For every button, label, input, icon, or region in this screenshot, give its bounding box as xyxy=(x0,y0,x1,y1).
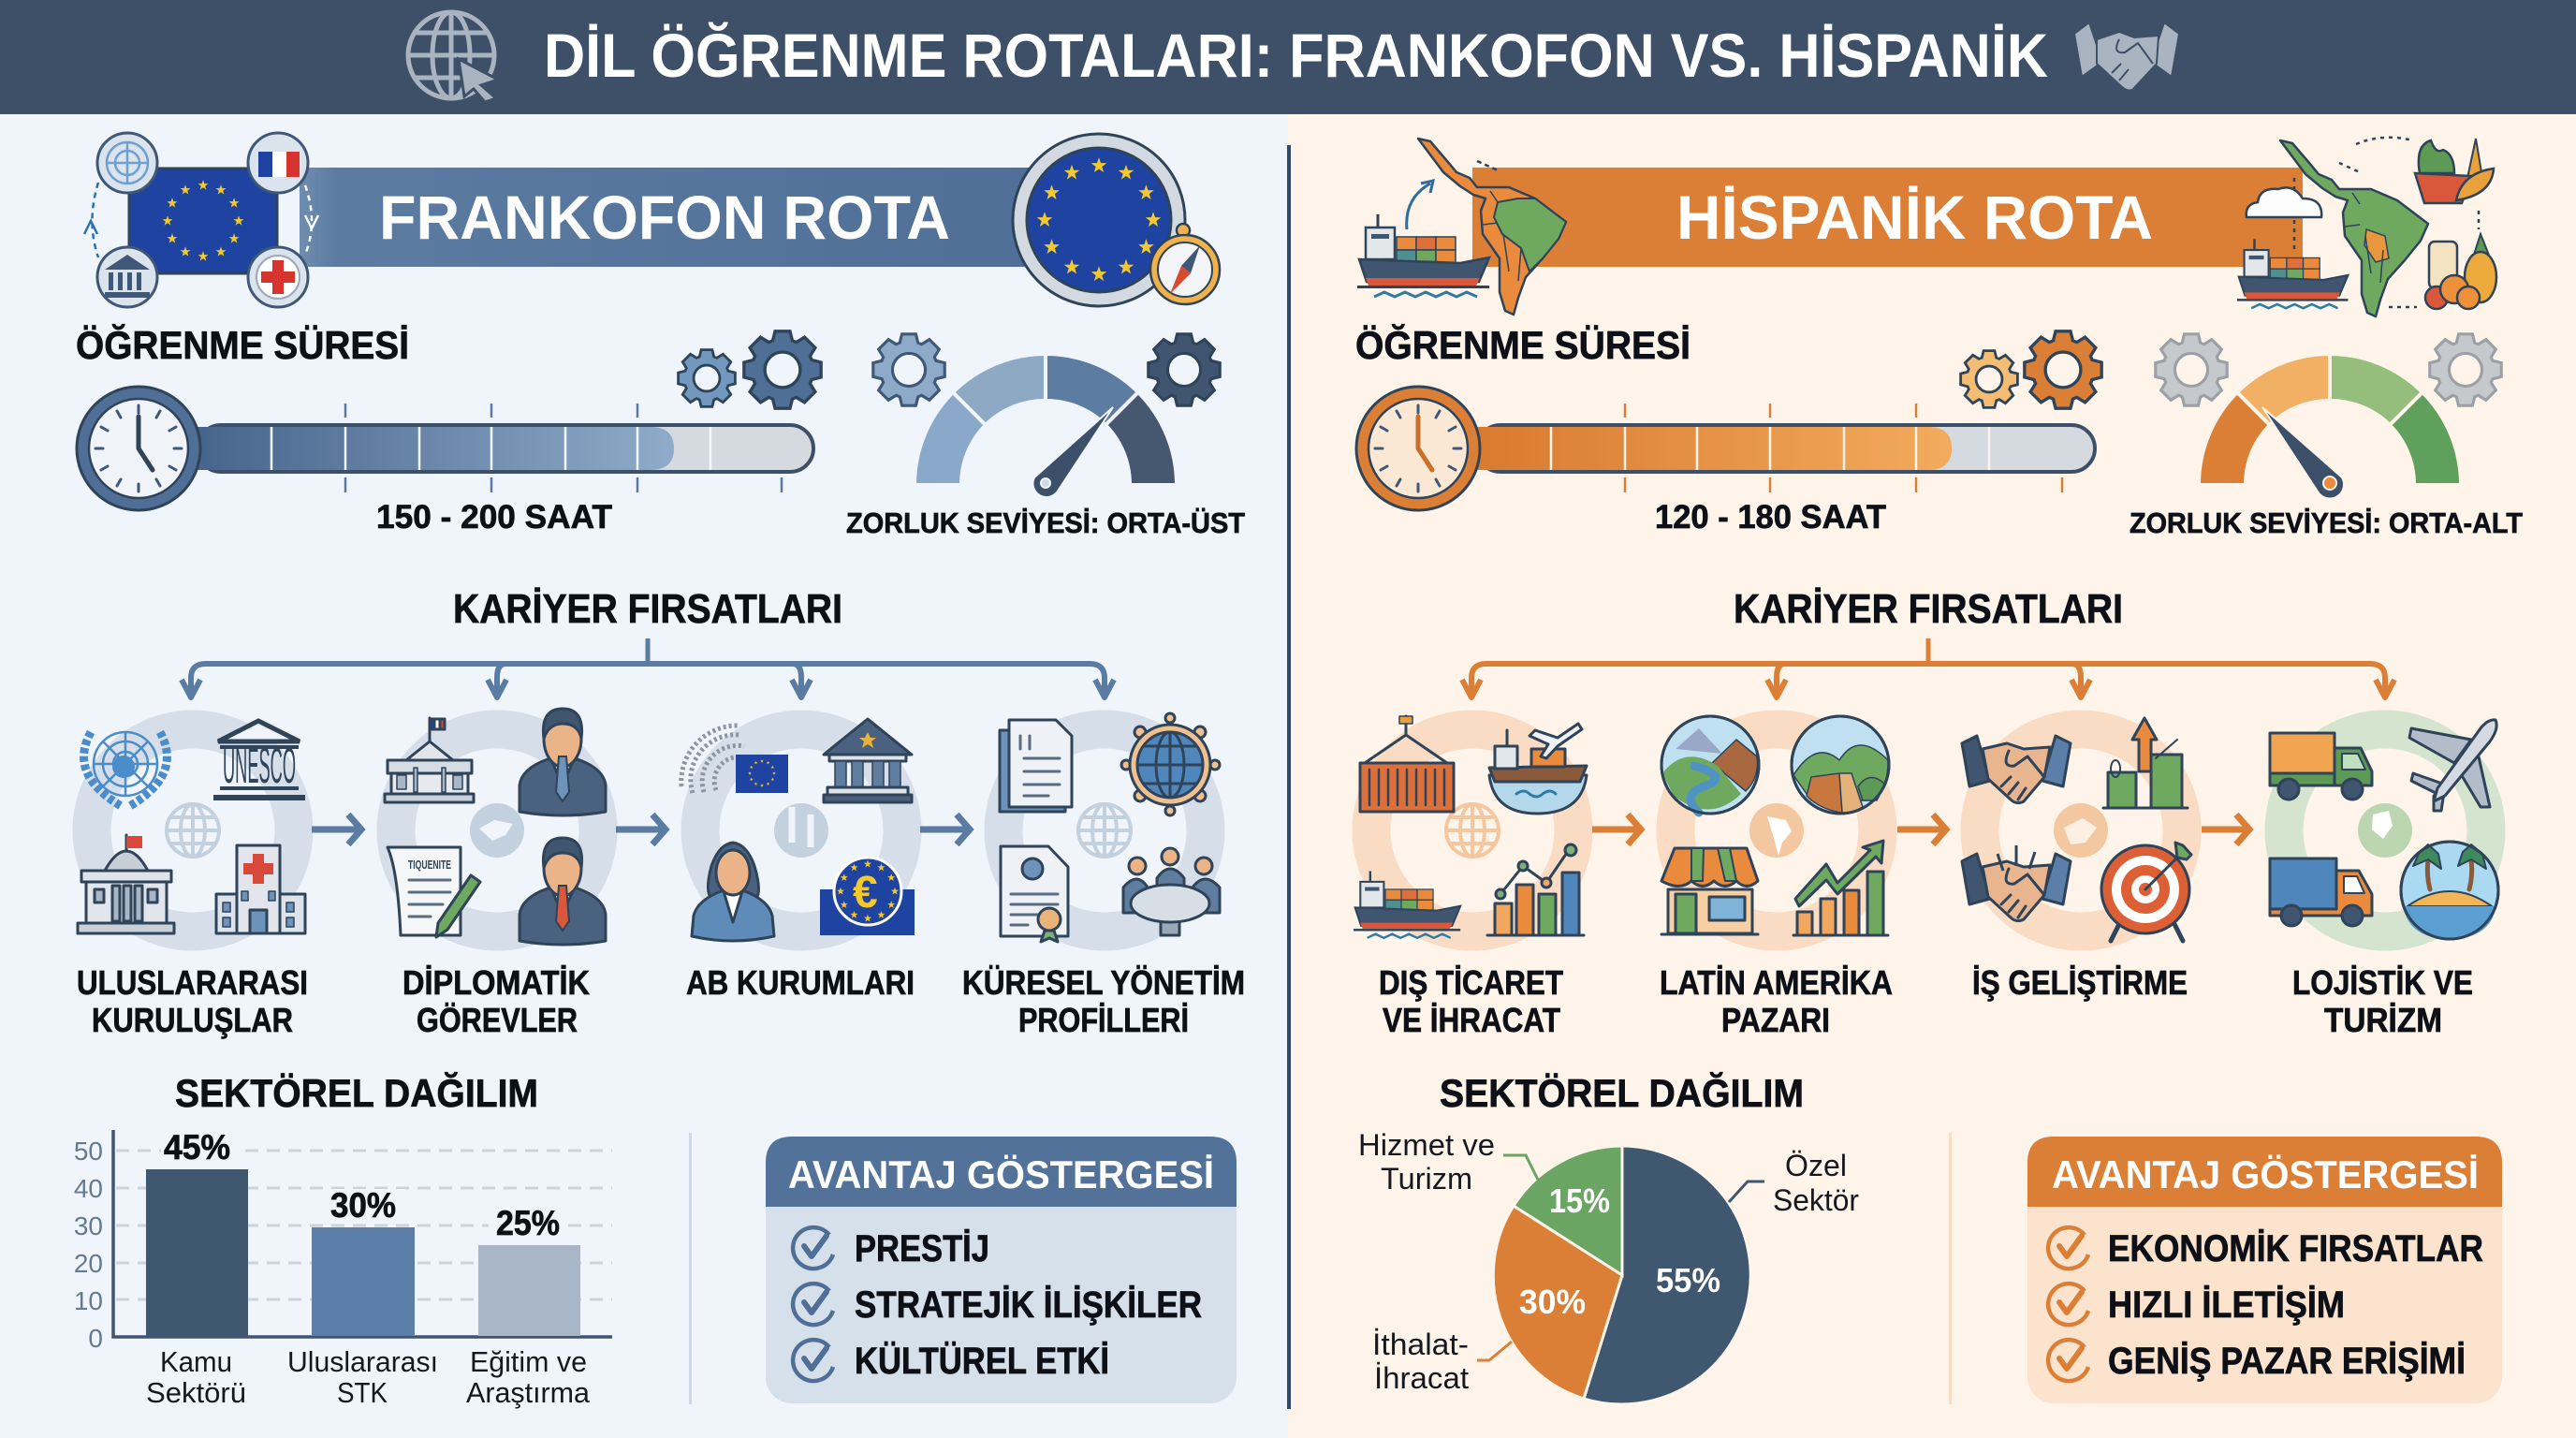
axis labels: 40 xyxy=(74,1174,103,1203)
needle xyxy=(1032,407,1113,497)
globe xyxy=(167,804,219,857)
arrow xyxy=(1592,814,1641,844)
icon: rising bars xyxy=(1793,841,1888,935)
pie labels: Turizm xyxy=(1381,1162,1472,1196)
globe xyxy=(1749,803,1804,858)
icon: small gear xyxy=(679,350,735,406)
badge: red cross xyxy=(248,247,308,307)
label: TURİZM xyxy=(2324,1001,2442,1039)
duration: 120 - 180 SAAT xyxy=(1655,499,1886,536)
label: GÖREVLER xyxy=(417,1001,578,1039)
label: AB KURUMLARI xyxy=(686,963,915,1002)
icon: clock xyxy=(1356,387,1480,510)
label xyxy=(402,963,590,1039)
badge: UNESCO temple xyxy=(97,247,157,307)
background panel: hispanik xyxy=(1288,0,2576,1438)
slice: özel sektör xyxy=(1584,1146,1750,1404)
icon: map, ship and produce right xyxy=(2237,138,2496,316)
globe xyxy=(1446,804,1499,857)
bar: eğitim xyxy=(478,1245,580,1336)
icon: woman official xyxy=(692,843,774,941)
difficulty label: ZORLUK SEVİYESİ: ORTA-ALT xyxy=(2130,506,2523,539)
arrow xyxy=(616,814,666,844)
badge: France flag xyxy=(248,133,308,193)
icon: shop xyxy=(1661,848,1758,934)
icon: large gear xyxy=(744,331,821,408)
icon: diplomat red tie xyxy=(520,838,606,945)
item: kültürel: KÜLTÜREL ETKİ xyxy=(855,1340,1109,1382)
label xyxy=(1660,963,1893,1039)
center divider xyxy=(1287,145,1291,1409)
icon: truck blue xyxy=(2270,858,2372,926)
icon: parliament xyxy=(681,726,788,793)
pie labels: İhracat xyxy=(1374,1361,1469,1395)
item: ekonomik: EKONOMİK FIRSATLAR xyxy=(2108,1228,2483,1269)
panel title: AVANTAJ GÖSTERGESİ xyxy=(2052,1152,2479,1196)
axis labels xyxy=(74,1137,103,1353)
label xyxy=(1379,963,1563,1039)
career card: lojistik ve turizm xyxy=(2270,720,2498,1039)
icon: globe with cursor xyxy=(408,12,498,102)
icon: government building xyxy=(78,835,174,933)
banner title: HİSPANİK ROTA xyxy=(1676,183,2153,252)
icon: EU flag with institution badges xyxy=(84,133,318,307)
icon: ship with plane xyxy=(1489,724,1587,814)
icon: cloud xyxy=(2247,187,2321,217)
ring xyxy=(2284,729,2486,932)
icon: meeting table xyxy=(1123,848,1220,935)
item: prestij: PRESTİJ xyxy=(855,1228,989,1269)
icon: gear grey right xyxy=(2430,334,2501,405)
globe xyxy=(2054,803,2108,858)
gauge xyxy=(915,354,1177,497)
heading: sector frankofon: SEKTÖREL DAĞILIM xyxy=(175,1071,538,1115)
icon: target xyxy=(2101,843,2191,941)
icon: growth chart xyxy=(1487,844,1584,935)
icon: gear grey left xyxy=(2156,334,2227,405)
banner: hispanik rota xyxy=(1472,168,2303,267)
leader: ithalat xyxy=(1477,1342,1512,1360)
gauge xyxy=(2199,354,2461,499)
ring xyxy=(92,729,294,932)
icon: compass xyxy=(1150,224,1220,304)
item: geniş: GENİŞ PAZAR ERİŞİMİ xyxy=(2108,1341,2466,1382)
label: PROFİLLERİ xyxy=(1018,1001,1189,1039)
career card: iş geliştirme xyxy=(1962,718,2191,1002)
heading: ÖĞRENME SÜRESİ xyxy=(1355,323,1690,367)
icon: airplane xyxy=(2409,720,2496,811)
icon: cargo ship xyxy=(1357,214,1489,297)
pie labels: Hizmet ve xyxy=(1358,1128,1495,1162)
panel: avantaj frankofon xyxy=(766,1137,1237,1403)
axis labels: 30 xyxy=(74,1211,103,1240)
axis labels: 50 xyxy=(74,1137,103,1166)
category labels: Araştırma xyxy=(466,1376,591,1409)
icon: handshake with sparks xyxy=(1962,845,2071,921)
arrow tree hispanik xyxy=(1462,638,2394,697)
pie labels: Sektör xyxy=(1773,1183,1859,1217)
icon: UNESCO temple xyxy=(213,721,305,800)
arrow tree frankofon xyxy=(182,638,1114,697)
banner title: FRANKOFON ROTA xyxy=(379,183,950,252)
label: DİPLOMATİK xyxy=(402,963,590,1002)
values: 15% xyxy=(1549,1181,1610,1220)
ring xyxy=(1980,729,2182,932)
icon: embassy xyxy=(385,718,474,802)
icon: hospital xyxy=(216,845,305,933)
icon: pineapple and fruit xyxy=(2425,234,2496,309)
heading: sector hispanik: SEKTÖREL DAĞILIM xyxy=(1440,1071,1804,1115)
icon: certificate xyxy=(1001,846,1068,942)
icon: ship xyxy=(2237,239,2348,308)
icon: farmland landscape xyxy=(1792,716,1889,814)
progress bar xyxy=(1477,404,2095,492)
values xyxy=(1519,1181,1720,1321)
values: 45% xyxy=(164,1128,230,1167)
label: İŞ GELİŞTİRME xyxy=(1972,963,2188,1002)
label: LOJİSTİK VE xyxy=(2292,963,2473,1002)
icon: small gear xyxy=(1961,351,2017,407)
career card: dış ticaret xyxy=(1354,716,1587,1039)
bar chart xyxy=(74,1128,612,1409)
section: difficulty gauge frankofon xyxy=(846,334,1245,539)
career card: uluslararası kuruluşlar xyxy=(77,721,308,1039)
label xyxy=(2292,963,2473,1039)
axis labels: 0 xyxy=(88,1324,103,1353)
values: 25% xyxy=(496,1204,560,1242)
label: PAZARI xyxy=(1721,1001,1830,1039)
values xyxy=(164,1128,560,1242)
icon: large gear xyxy=(2025,331,2101,408)
pie labels: Özel xyxy=(1785,1149,1847,1182)
icon: ship and Latin America map left xyxy=(1357,139,1566,315)
item: stratejik: STRATEJİK İLİŞKİLER xyxy=(855,1284,1202,1326)
career card: ab kurumları xyxy=(681,719,915,1002)
category labels: STK xyxy=(337,1376,388,1409)
arrow xyxy=(920,814,970,844)
duration: 150 - 200 SAAT xyxy=(376,499,612,536)
icon: diplomat xyxy=(520,709,606,815)
icon: treaty document: TIQUENITE xyxy=(408,858,451,872)
banner: frankofon rota xyxy=(300,168,1039,267)
section: learning time hispanik xyxy=(1355,323,2101,536)
item: hızlı: HIZLI İLETİŞİM xyxy=(2108,1284,2345,1326)
axis labels: 20 xyxy=(74,1249,103,1278)
panel title: AVANTAJ GÖSTERGESİ xyxy=(788,1152,1214,1196)
icon: EU circle with compass xyxy=(1013,134,1220,306)
globe xyxy=(1078,804,1131,857)
arrow xyxy=(1897,814,1946,844)
leader: hizmet xyxy=(1503,1155,1543,1189)
icon: handshake xyxy=(1962,736,2071,803)
arrow xyxy=(312,814,361,844)
arrow xyxy=(2202,814,2249,844)
ring xyxy=(1371,729,1573,932)
bar: kamu xyxy=(146,1169,248,1336)
icon: UN emblem xyxy=(84,732,167,807)
icon: gear light xyxy=(873,334,944,405)
bar: uluslararası xyxy=(312,1227,415,1336)
text: UNESCO xyxy=(223,738,296,794)
values: 30% xyxy=(1519,1283,1586,1321)
globe xyxy=(2358,803,2412,858)
icon: cargo ship xyxy=(1354,872,1460,938)
badge: UN xyxy=(97,133,157,193)
axis labels: 10 xyxy=(74,1286,103,1315)
label xyxy=(962,963,1245,1039)
pie chart xyxy=(1358,1128,1859,1404)
icon: growth with arrow xyxy=(2103,718,2188,808)
label: VE İHRACAT xyxy=(1383,1001,1560,1039)
leader: özel xyxy=(1729,1181,1764,1202)
section: difficulty gauge hispanik xyxy=(2130,334,2523,539)
panel: avantaj hispanik xyxy=(2027,1137,2502,1403)
ring xyxy=(1003,729,1206,932)
slice: ithalat-ihracat xyxy=(1493,1206,1622,1399)
globe xyxy=(470,803,524,858)
icon: river landscape xyxy=(1661,716,1759,814)
globe xyxy=(774,803,828,858)
label: LATİN AMERİKA xyxy=(1660,963,1893,1002)
values: 55% xyxy=(1656,1261,1720,1299)
values: 30% xyxy=(330,1186,396,1225)
progress bar xyxy=(198,404,813,492)
heading: career frankofon: KARİYER FIRSATLARI xyxy=(453,586,842,632)
label: KURULUŞLAR xyxy=(92,1001,293,1039)
header bar xyxy=(0,0,2576,114)
category labels: Eğitim ve xyxy=(470,1345,587,1378)
label: DIŞ TİCARET xyxy=(1379,963,1563,1002)
needle xyxy=(2262,407,2344,499)
icon: produce basket xyxy=(2415,139,2494,203)
icon: truck green xyxy=(2270,733,2372,800)
icon: container on crane xyxy=(1360,716,1454,812)
icon: gear dark xyxy=(1149,334,1220,405)
pie labels: İthalat- xyxy=(1372,1328,1469,1361)
background panel: frankofon xyxy=(0,0,1288,1438)
category labels: Sektörü xyxy=(146,1376,246,1409)
item: prestij xyxy=(793,1227,989,1269)
heading: career hispanik: KARİYER FIRSATLARI xyxy=(1734,586,2123,632)
career card: diplomatik görevler xyxy=(385,709,606,1039)
category labels: Kamu xyxy=(160,1345,232,1378)
career card: latin amerika pazarı xyxy=(1660,716,1893,1039)
category labels xyxy=(146,1345,591,1409)
title: DİL ÖĞRENME ROTALARI: FRANKOFON VS. HİSPANİK xyxy=(544,21,2048,90)
career card: küresel yönetim xyxy=(962,713,1245,1039)
label: ULUSLARARASI xyxy=(77,963,308,1002)
difficulty label: ZORLUK SEVİYESİ: ORTA-ÜST xyxy=(846,506,1245,539)
icon: euro emblem: € xyxy=(853,868,878,917)
icon: treaty document xyxy=(388,847,480,937)
icon: temple xyxy=(824,719,912,802)
label: KÜRESEL YÖNETİM xyxy=(962,963,1245,1002)
ring xyxy=(700,729,902,932)
icon: euro emblem xyxy=(820,858,915,935)
heading: ÖĞRENME SÜRESİ xyxy=(76,323,409,367)
icon: documents xyxy=(1000,720,1072,812)
ring xyxy=(1676,729,1878,932)
section: learning time frankofon xyxy=(76,323,821,536)
slice: hizmet xyxy=(1514,1146,1622,1275)
icon: island xyxy=(2401,842,2498,939)
icon: handshake xyxy=(2074,22,2179,90)
category labels: Uluslararası xyxy=(287,1345,438,1378)
icon: clock xyxy=(77,387,200,510)
icon: global governance xyxy=(1121,713,1220,815)
ring xyxy=(396,729,598,932)
axis xyxy=(113,1130,612,1337)
pie labels xyxy=(1358,1128,1859,1395)
label xyxy=(77,963,308,1039)
